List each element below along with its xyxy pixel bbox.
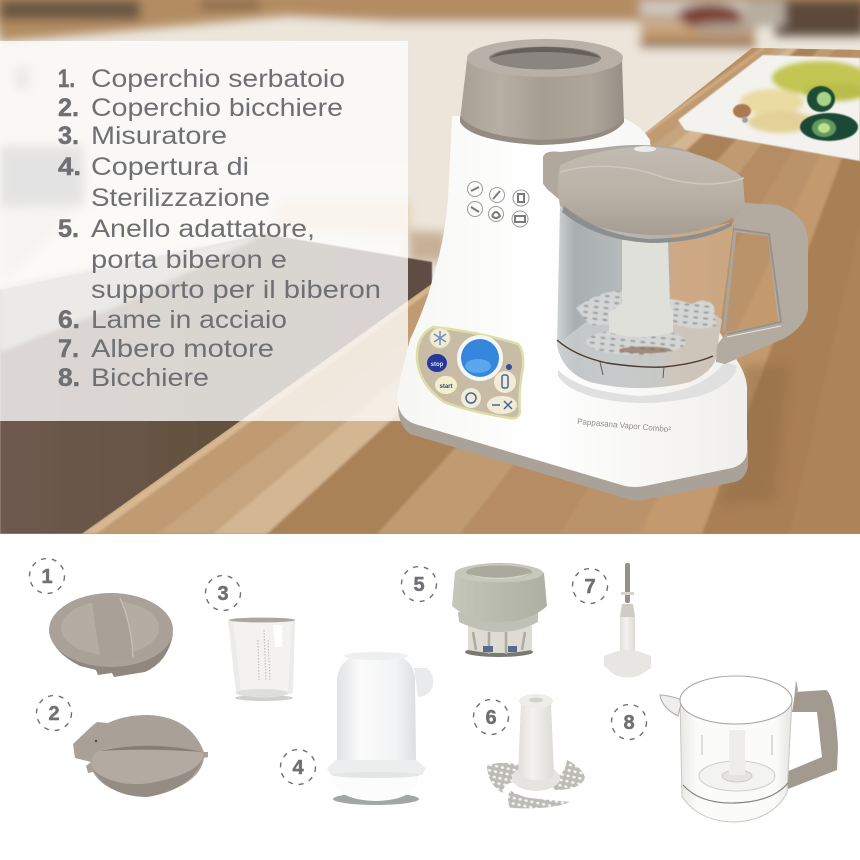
part 4: sterilising cover xyxy=(327,652,433,805)
item 2: Coperchio bicchiere xyxy=(91,94,343,122)
item 5: porta biberon e xyxy=(91,246,287,274)
item 5: supporto per il biberon xyxy=(91,276,381,304)
jar base collar xyxy=(558,362,737,403)
part 7: motor shaft xyxy=(604,563,651,678)
number badge 6 xyxy=(474,700,508,734)
item 6: Lame in acciaio xyxy=(91,306,287,334)
food plate xyxy=(678,55,860,161)
part 8: jar xyxy=(660,676,838,822)
brand label: Pappasana Vapor Combo² xyxy=(577,417,672,434)
number badge 4 xyxy=(280,750,316,784)
number badge 3: 3 xyxy=(217,583,229,605)
part 1: tank lid xyxy=(49,593,173,677)
parts list xyxy=(58,65,381,392)
part 6: steel blades xyxy=(487,694,585,808)
number badge 2 xyxy=(36,696,72,730)
food processor appliance xyxy=(397,39,808,500)
item 6: 6. xyxy=(58,306,80,334)
number badge 8: 8 xyxy=(623,712,635,734)
number badge 3 xyxy=(206,576,240,610)
panel buttons: start xyxy=(439,384,453,390)
jar handle xyxy=(716,202,808,364)
part 2: jar lid xyxy=(73,715,208,797)
number badge 7 xyxy=(572,568,608,604)
item 3: 3. xyxy=(58,122,79,150)
jar base line xyxy=(557,340,713,367)
steam tank grey cylinder xyxy=(460,39,624,145)
machine grey base rim xyxy=(398,400,748,500)
number badge 7: 7 xyxy=(584,576,596,598)
number badge 8 xyxy=(612,704,646,740)
number badge 4: 4 xyxy=(292,757,304,779)
item 7: 7. xyxy=(58,335,79,363)
number badge 5 xyxy=(402,566,436,602)
jar lid xyxy=(558,146,745,235)
item 8: 8. xyxy=(58,364,80,392)
item 8: Bicchiere xyxy=(91,364,209,392)
number badge 1: 1 xyxy=(41,566,53,588)
steam tray xyxy=(576,291,716,355)
LCD display xyxy=(457,335,503,381)
translucent panel xyxy=(0,41,408,421)
item 3 xyxy=(58,122,227,150)
back lid tab xyxy=(543,145,700,200)
item 5: Anello adattatore, xyxy=(91,215,315,243)
glass jar xyxy=(557,207,734,388)
item 5 xyxy=(58,215,381,304)
panel buttons xyxy=(427,328,517,414)
item 1: 1. xyxy=(58,65,75,93)
part 3: measuring cup xyxy=(228,618,295,701)
machine body xyxy=(397,116,747,487)
item 5: 5. xyxy=(58,215,79,243)
item 1: Coperchio serbatoio xyxy=(91,65,345,93)
number badge 1 xyxy=(30,558,64,594)
item 4: 4. xyxy=(58,153,81,181)
item 4 xyxy=(58,153,270,212)
central shaft xyxy=(609,240,673,337)
item 8 xyxy=(58,364,209,392)
item 3: Misuratore xyxy=(91,122,227,150)
panel buttons: stop xyxy=(431,362,444,368)
item 4: Sterilizzazione xyxy=(91,184,270,212)
jar lower highlight xyxy=(558,301,722,388)
part 5: adapter ring xyxy=(452,563,547,657)
number badge 6: 6 xyxy=(485,707,497,729)
floor shadow xyxy=(0,234,432,534)
accessories panel xyxy=(0,534,860,860)
item 7: Albero motore xyxy=(91,335,274,363)
kitchen photo background xyxy=(0,0,860,534)
wood counter planks xyxy=(82,48,860,534)
number badge 2: 2 xyxy=(48,703,60,725)
number badge 5: 5 xyxy=(413,574,425,596)
item 4: Copertura di xyxy=(91,153,249,181)
six mode icons xyxy=(468,182,529,227)
control panel xyxy=(417,327,523,418)
item 2: 2. xyxy=(58,94,79,122)
